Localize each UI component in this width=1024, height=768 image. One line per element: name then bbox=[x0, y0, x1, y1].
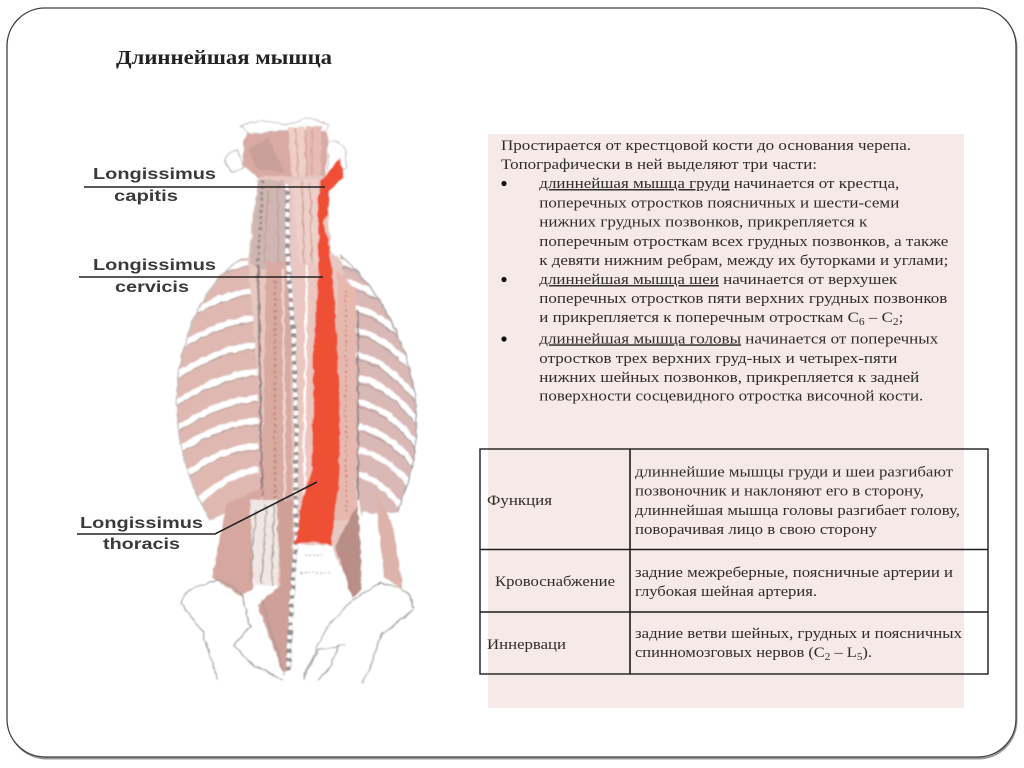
right rib cage bbox=[340, 256, 417, 516]
label: longissimus cervicis: Longissimus bbox=[93, 257, 216, 274]
row: innervation: 5 bbox=[857, 652, 862, 663]
row: innervation: Иннерваци bbox=[487, 637, 566, 653]
bullet: chest part bbox=[501, 181, 507, 186]
bullet: neck part bbox=[501, 277, 507, 282]
bullet: head part bbox=[501, 336, 507, 342]
text block: description: длиннейшая мышца груди начинается от крестца, bbox=[539, 176, 899, 192]
text block: description: нижних шейных позвонков, прикрепляется к задней bbox=[539, 370, 919, 386]
label: longissimus cervicis bbox=[79, 257, 323, 296]
text block: description: поперечных отростков поясничных и шести-семи bbox=[539, 196, 899, 212]
anatomy illustration: back muscles bbox=[165, 118, 428, 683]
label: longissimus capitis: capitis bbox=[114, 188, 178, 205]
sacrum bbox=[290, 545, 352, 680]
label: longissimus capitis: Longissimus bbox=[93, 166, 216, 183]
lower back muscles bbox=[212, 488, 262, 595]
row: function: Функция bbox=[487, 493, 552, 509]
label: longissimus thoracis bbox=[77, 482, 317, 553]
row: function: поворачивая лицо в свою сторону bbox=[635, 522, 878, 538]
text block: description: Простирается от крестцовой кости до основания черепа. bbox=[501, 138, 911, 154]
row: innervation bbox=[487, 626, 963, 663]
row: innervation: ). bbox=[862, 645, 872, 661]
text block: description bbox=[501, 138, 949, 404]
spinal column dots bbox=[287, 185, 296, 670]
text block: description: поверхности сосцевидного отростка височной кости. bbox=[539, 388, 923, 404]
text block: description: поперечных отростков пяти верхних грудных позвонков bbox=[539, 291, 947, 307]
label: longissimus thoracis: Longissimus bbox=[80, 515, 203, 532]
text block: description: длиннейшая мышца шеи начинается от верхушек bbox=[539, 272, 898, 288]
text block: description: Топографически в ней выделяют три части: bbox=[501, 157, 817, 173]
row: function: длиннейшие мышцы груди и шеи разгибают bbox=[635, 465, 954, 481]
left rib cage bbox=[176, 257, 263, 521]
text block: description: отростков трех верхних груд-ных и четырех-пяти bbox=[539, 351, 897, 367]
text block: description: 2 bbox=[893, 317, 899, 328]
text block: description: – С bbox=[865, 310, 893, 326]
row: blood supply: глубокая шейная артерия. bbox=[635, 584, 817, 600]
row: innervation: – L bbox=[830, 645, 857, 661]
row: blood supply: Кровоснабжение bbox=[495, 574, 615, 590]
row: function: позвоночник и наклоняют его в сторону, bbox=[635, 484, 924, 500]
table: function, blood supply, innervation bbox=[480, 449, 988, 674]
row: innervation: 2 bbox=[825, 652, 830, 663]
row: innervation: задние ветви шейных, грудных и поясничных bbox=[635, 626, 963, 642]
right rib outline bbox=[340, 255, 416, 512]
label: longissimus thoracis: thoracis bbox=[103, 536, 180, 553]
text block: description: нижних грудных позвонков, прикрепляется к bbox=[539, 215, 868, 231]
panel: description background bbox=[488, 134, 964, 708]
text block: description: к девяти нижним ребрам, между их буторками и углами; bbox=[539, 253, 948, 269]
neck and torso central muscle mass bbox=[248, 176, 358, 600]
text block: description: и прикрепляется к поперечным отросткам С bbox=[539, 310, 819, 326]
label: longissimus cervicis: cervicis bbox=[115, 279, 189, 296]
text block: description: длиннейшая мышца головы начинается от поперечных bbox=[539, 331, 939, 347]
row: innervation: спинномозговых нервов (С bbox=[635, 645, 806, 661]
row: blood supply: задние межреберные, поясничные артерии и bbox=[635, 565, 953, 581]
row: function: длиннейшая мышца головы разгибает голову, bbox=[635, 503, 960, 519]
title: Длиннейшая мышца bbox=[116, 48, 332, 69]
pelvis outlines bbox=[181, 580, 414, 683]
left rib outline bbox=[177, 258, 244, 520]
row: function bbox=[487, 465, 960, 538]
label: longissimus capitis bbox=[84, 166, 325, 205]
head muscle block bbox=[243, 122, 328, 184]
text block: description: 6 bbox=[859, 317, 865, 328]
text block: description: ; bbox=[899, 310, 903, 326]
longissimus muscle, highlighted in red bbox=[295, 158, 344, 546]
row: blood supply bbox=[495, 565, 953, 600]
text block: description: поперечным отросткам всех грудных позвонков, а также bbox=[539, 234, 949, 250]
